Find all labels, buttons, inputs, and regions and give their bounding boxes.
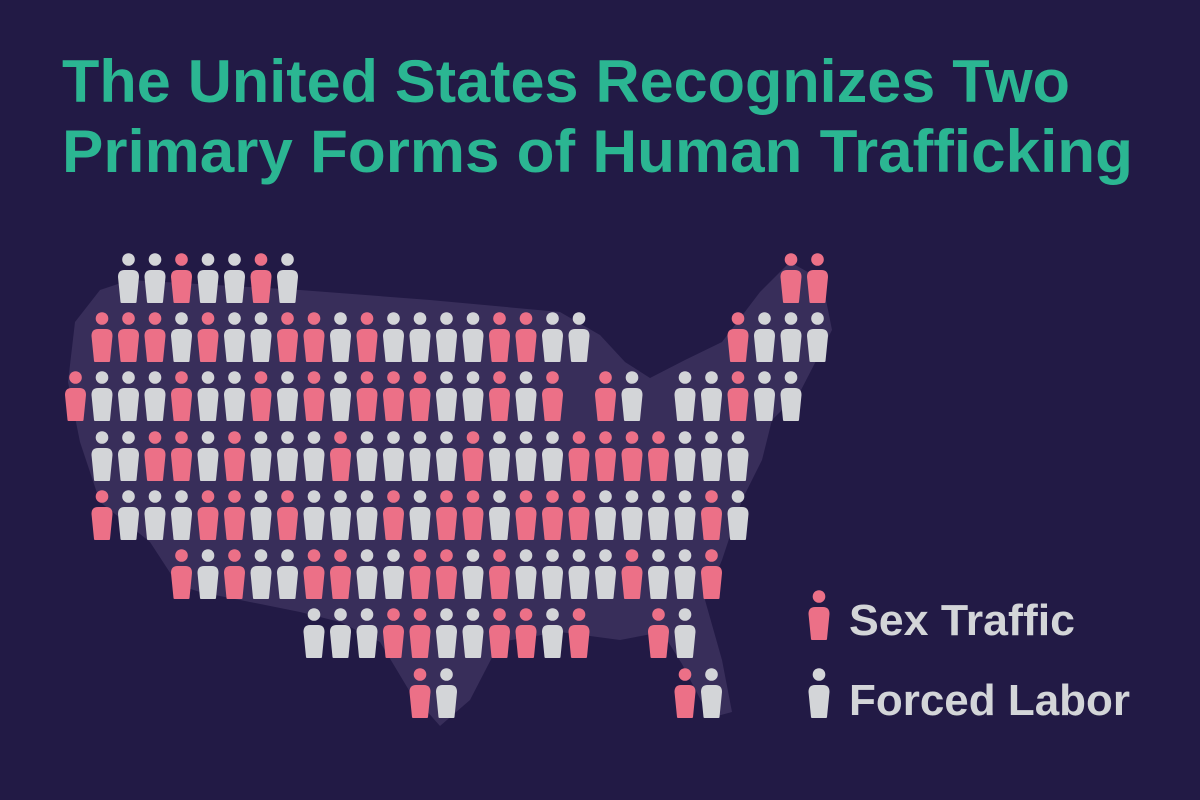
row 5 <box>92 490 748 540</box>
row 3 <box>65 371 802 421</box>
row 7 <box>304 608 696 658</box>
map silhouette <box>68 262 832 726</box>
row 1 <box>118 253 828 303</box>
row 2 <box>92 312 828 362</box>
row 8 <box>410 668 722 718</box>
pictogram grid <box>65 253 828 718</box>
legend <box>808 590 1130 725</box>
legend: sex traffic: Sex Traffic <box>849 596 1075 645</box>
legend: forced labor: Forced Labor <box>849 676 1130 725</box>
title: The United States Recognizes Two <box>62 48 1070 115</box>
row 4 <box>92 431 748 481</box>
title <box>62 48 1133 185</box>
title: Primary Forms of Human Trafficking <box>62 118 1133 185</box>
row 6 <box>171 549 722 599</box>
